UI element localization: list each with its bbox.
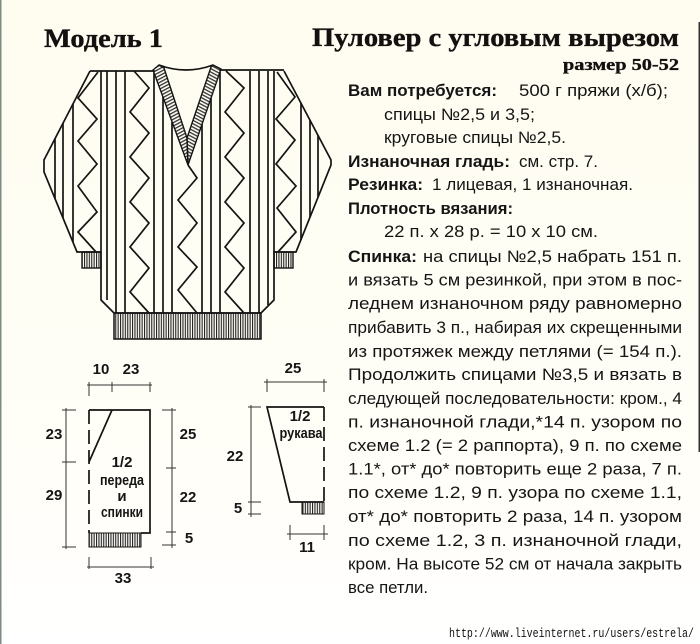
dimension numbers bbox=[227, 360, 315, 556]
dimension numbers: 10 bbox=[93, 361, 109, 378]
back opening line: на спицы №2,5 набрать 151 п. bbox=[423, 248, 682, 266]
dimension numbers: 5 bbox=[185, 530, 193, 547]
size label: размер 50-52 bbox=[563, 55, 679, 74]
inner label: рукава bbox=[280, 425, 323, 442]
paragraph lines: следующей последовательности: кром., 4 bbox=[348, 390, 682, 408]
dimension numbers: 25 bbox=[180, 426, 196, 443]
inner label bbox=[280, 408, 323, 442]
paragraph lines bbox=[348, 272, 682, 597]
sleeve pattern lines bbox=[55, 72, 318, 252]
body vertical cables bbox=[107, 71, 268, 313]
fold line dashed bbox=[323, 407, 325, 502]
paragraph lines: и вязать 5 см резинкой, при этом в пос- bbox=[348, 272, 682, 290]
inner label: спинки bbox=[101, 504, 143, 521]
dimension lines bbox=[62, 382, 176, 569]
gauge heading: Плотность вязания: bbox=[348, 200, 513, 218]
sleeve cuffs bbox=[82, 252, 293, 268]
paragraph lines: 1.1*, от* до* повторить еще 2 раза, 7 п. bbox=[348, 460, 682, 478]
materials line: Вам потребуется: bbox=[348, 82, 497, 100]
title: model number: Модель 1 bbox=[44, 24, 163, 53]
body zigzag cables bbox=[130, 71, 244, 313]
bottom ribbing bbox=[114, 313, 261, 339]
reverse stockinette: см. стр. 7. bbox=[519, 153, 598, 171]
paragraph lines: по схеме 1.2, 3 п. изнаночной глади, bbox=[348, 532, 682, 550]
dimension numbers: 29 bbox=[46, 487, 62, 504]
sweater body bbox=[90, 65, 284, 313]
schematic: half sleeve bbox=[227, 360, 328, 556]
heading: pullover name: Пуловер с угловым вырезом bbox=[312, 23, 679, 52]
dimension numbers: 33 bbox=[115, 570, 131, 587]
hem ribbing bbox=[89, 533, 141, 547]
dimension lines bbox=[248, 379, 328, 540]
sweater illustration bbox=[44, 65, 331, 339]
materials line: 500 г пряжи (х/б); bbox=[519, 82, 668, 100]
cuff ribbing bbox=[302, 502, 324, 514]
circular needles: круговые спицы №2,5. bbox=[384, 129, 566, 147]
back opening line: Спинка: bbox=[348, 248, 417, 266]
outline bbox=[89, 410, 150, 533]
reverse stockinette: Изнаночная гладь: bbox=[348, 153, 510, 171]
inner label bbox=[100, 454, 145, 521]
gauge value: 22 п. х 28 р. = 10 х 10 см. bbox=[384, 223, 598, 241]
dimension numbers: 23 bbox=[46, 426, 62, 443]
dimension numbers: 22 bbox=[180, 489, 196, 506]
outline bbox=[267, 407, 324, 502]
dimension numbers: 23 bbox=[123, 361, 139, 378]
inner label: и bbox=[117, 488, 127, 505]
inner label: 1/2 bbox=[112, 454, 132, 471]
back opening line bbox=[348, 248, 682, 266]
ribbing bbox=[348, 176, 633, 194]
dimension numbers: 11 bbox=[299, 539, 315, 556]
paragraph lines: прибавить 3 п., набирая их скрещенными bbox=[348, 319, 682, 337]
paragraph lines: все петли. bbox=[348, 579, 428, 597]
V-neck ribbing bbox=[153, 65, 221, 165]
needles: спицы №2,5 и 3,5; bbox=[384, 106, 535, 124]
dimension numbers: 22 bbox=[227, 448, 243, 465]
paragraph lines: леднем изнаночном ряду равномерно bbox=[348, 295, 682, 313]
ribbing: 1 лицевая, 1 изнаночная. bbox=[432, 176, 633, 194]
paragraph lines: схеме 1.2 (= 2 раппорта), 9 п. по схеме bbox=[348, 437, 682, 455]
reverse stockinette bbox=[348, 153, 598, 171]
inner label: 1/2 bbox=[290, 408, 310, 425]
paragraph lines: п. изнаночной глади,*14 п. узором по bbox=[348, 414, 682, 432]
dimension numbers: 5 bbox=[234, 500, 242, 517]
text block: back instructions bbox=[348, 248, 682, 597]
fold line dashed bbox=[88, 410, 90, 533]
paragraph lines: от* до* повторить 2 раза, 14 п. узором bbox=[348, 508, 682, 526]
dimension numbers: 25 bbox=[285, 360, 301, 377]
paragraph lines: Продолжить спицами №3,5 и вязать в bbox=[348, 366, 682, 384]
inner label: переда bbox=[100, 472, 145, 489]
materials line bbox=[348, 82, 668, 100]
schematic: half front and back bbox=[46, 361, 196, 587]
sleeves outline bbox=[44, 71, 331, 252]
ribbing: Резинка: bbox=[348, 176, 423, 194]
paragraph lines: из протяжек между петлями (= 154 п.). bbox=[348, 343, 682, 361]
dimension numbers bbox=[46, 361, 196, 587]
paragraph lines: по схеме 1.2, 9 п. узора по схеме 1.1, bbox=[348, 484, 682, 502]
paragraph lines: кром. На высоте 52 см от начала закрыть bbox=[348, 556, 682, 574]
text block: materials bbox=[348, 82, 668, 241]
